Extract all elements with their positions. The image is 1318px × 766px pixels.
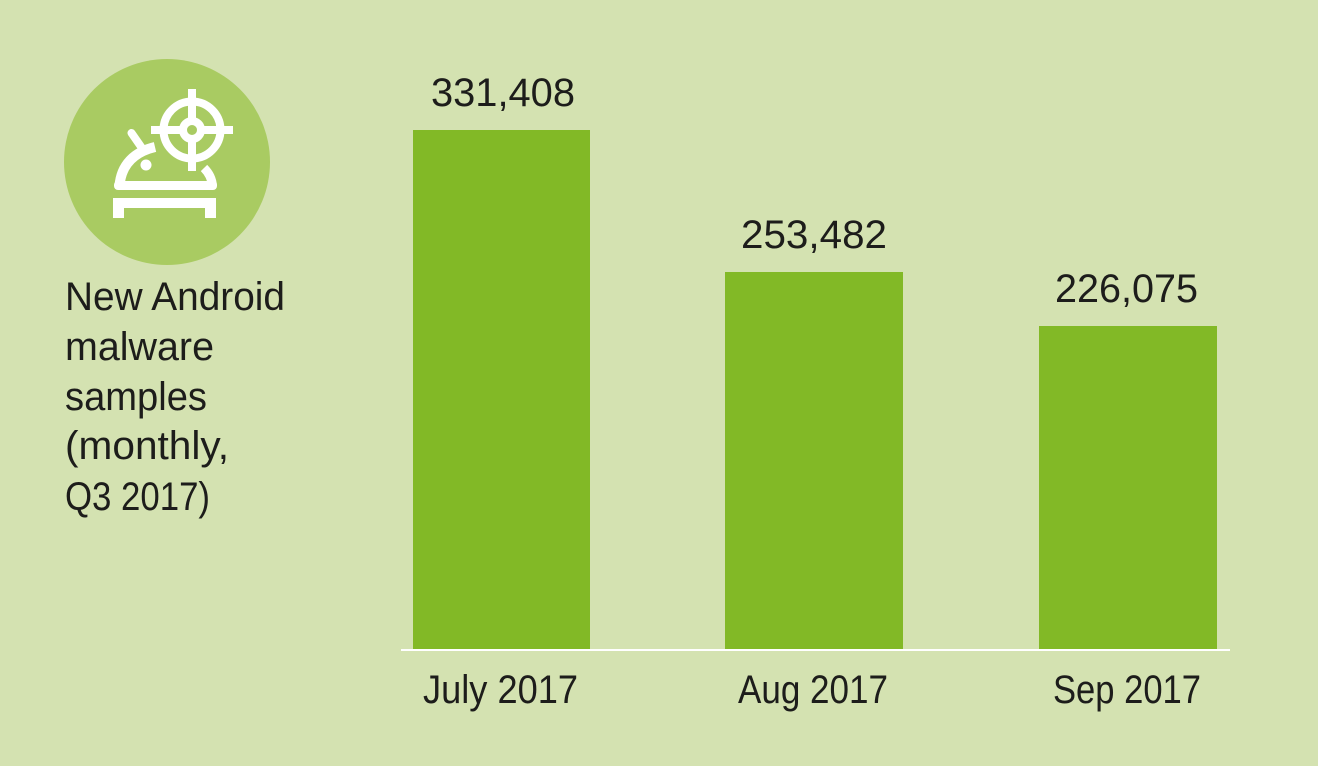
heading: chart description: New Android (65, 275, 285, 319)
heading: chart description (65, 275, 285, 519)
bar: July 2017 (413, 130, 590, 650)
icon: android with target (64, 59, 270, 265)
bar chart (401, 71, 1230, 712)
heading: chart description: malware (65, 325, 214, 369)
value: Aug: 253,482 (741, 213, 887, 257)
label: Sep: Sep 2017 (1053, 668, 1201, 712)
heading: chart description: Q3 2017) (65, 475, 210, 519)
value: Sep: 226,075 (1055, 267, 1198, 311)
bar: Sep 2017 (1039, 326, 1217, 650)
label: Aug: Aug 2017 (738, 668, 888, 712)
label: July: July 2017 (423, 668, 578, 712)
heading: chart description: samples (65, 375, 207, 419)
value: July: 331,408 (431, 71, 575, 115)
heading: chart description: (monthly, (65, 424, 229, 468)
bar: Aug 2017 (725, 272, 903, 650)
